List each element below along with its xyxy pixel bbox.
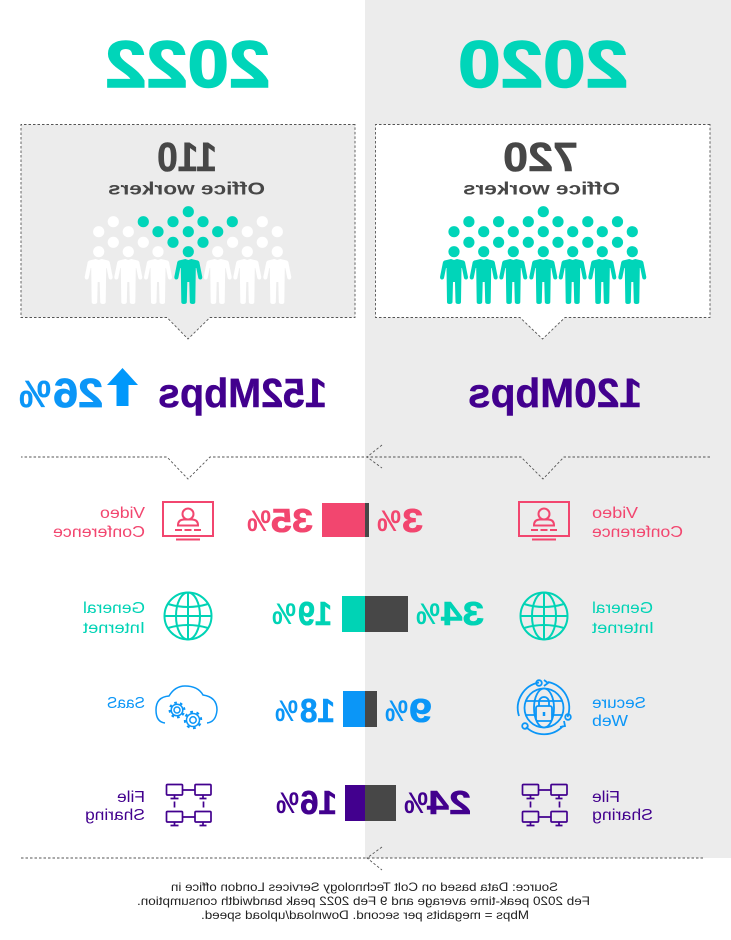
value: 16%: 16 (300, 784, 337, 821)
label: file sharing 2020: Sharing (592, 807, 653, 824)
bar: 2020 share (365, 503, 369, 537)
panel: 2022 office workers (21, 124, 355, 339)
value: 35%: % (247, 505, 271, 538)
bar: 2020 share (365, 596, 408, 632)
heading: 2022: 2022 (105, 27, 270, 101)
label: video conference 2020: Video (592, 505, 638, 522)
value: 19% (272, 595, 332, 632)
icon: up arrow (107, 368, 138, 406)
icon: globe 2022 (164, 592, 212, 640)
value: 16%: % (276, 787, 299, 820)
value: 24%: % (404, 787, 428, 820)
row: general internet (82, 592, 654, 640)
value: 3%: % (377, 505, 401, 538)
bottom divider with arrow (21, 847, 703, 870)
panel: 2020 office workers (376, 124, 710, 339)
bar: 2022 share (342, 596, 365, 632)
icon: file sharing 2022 (166, 784, 211, 826)
row: video conference (53, 502, 683, 541)
count: 110: 110 (157, 134, 217, 180)
icon: monitor 2022 (163, 502, 213, 540)
value: 34%: 34 (440, 595, 484, 632)
label: office workers 2020: Office workers (463, 178, 620, 198)
value: 9%: % (385, 695, 408, 728)
value: 34%: % (416, 598, 440, 631)
value: 16% (276, 784, 337, 821)
label: file sharing 2022: File (117, 789, 145, 806)
icon: file sharing 2020 (522, 784, 567, 826)
value: 9% (385, 692, 432, 729)
label: video conference 2022: Conference (53, 524, 145, 541)
divider with pointers (21, 445, 710, 479)
bar: 2022 share (345, 785, 365, 821)
value: 24% (404, 784, 471, 821)
value: 18% (275, 692, 335, 729)
label: file sharing 2022: Sharing (85, 807, 145, 824)
people icon group 2022 (85, 206, 291, 304)
label: video conference 2020: Conference (592, 524, 683, 541)
label: SaaS: SaaS (107, 695, 145, 712)
source note: Feb 2020 peak-time average and 9 Feb 2022 peak bandwidth consumption. (137, 894, 590, 908)
label: file sharing 2020: File (592, 789, 620, 806)
speed 2022: 152Mbps (158, 370, 327, 416)
icon: globe 2020 (520, 592, 568, 640)
label: general internet 2022: Internet (82, 620, 145, 637)
row: file sharing (85, 784, 653, 826)
panel: 2020 background (365, 0, 731, 858)
value: 19%: 19 (298, 595, 332, 632)
speed 2020: 120Mbps (468, 370, 642, 416)
bar: 2020 share (365, 691, 377, 727)
value: 3%: 3 (402, 502, 423, 539)
value: 19%: % (272, 598, 296, 631)
people icon group 2020 (440, 206, 646, 304)
bar: 2022 share (322, 503, 365, 537)
label: general internet 2020: General (592, 600, 653, 617)
row: secure web and SaaS (107, 680, 646, 734)
bar: 2020 share (365, 785, 396, 821)
value: 35% (247, 502, 313, 539)
value: 3% (377, 502, 423, 539)
source note: Source: Data based on Colt Technology Services London office in (171, 880, 558, 894)
increase 26% (19, 370, 103, 416)
value: 34% (416, 595, 484, 632)
icon: secure web (518, 680, 571, 734)
label: general internet 2020: Internet (591, 620, 654, 637)
increase 26%: 26 (53, 370, 103, 416)
increase 26%: % (19, 374, 51, 416)
label: video conference 2022: Video (100, 505, 145, 522)
label: secure web: Secure (592, 695, 646, 712)
bar: 2022 share (343, 691, 365, 727)
label: office workers 2022: Office workers (108, 178, 265, 198)
value: 9%: 9 (409, 692, 432, 729)
heading: 2020: 2020 (458, 27, 628, 101)
value: 35%: 35 (271, 502, 313, 539)
value: 24%: 24 (426, 784, 471, 821)
count: 720: 720 (503, 134, 578, 180)
value: 18%: % (275, 695, 298, 728)
label: general internet 2022: General (83, 600, 145, 617)
icon: cloud with gears (156, 686, 217, 728)
value: 18%: 18 (300, 692, 335, 729)
icon: monitor 2020 (519, 502, 569, 540)
label: secure web: Web (592, 713, 628, 730)
source note: Mbps = megabits per second. Download/upload speed. (201, 908, 529, 922)
